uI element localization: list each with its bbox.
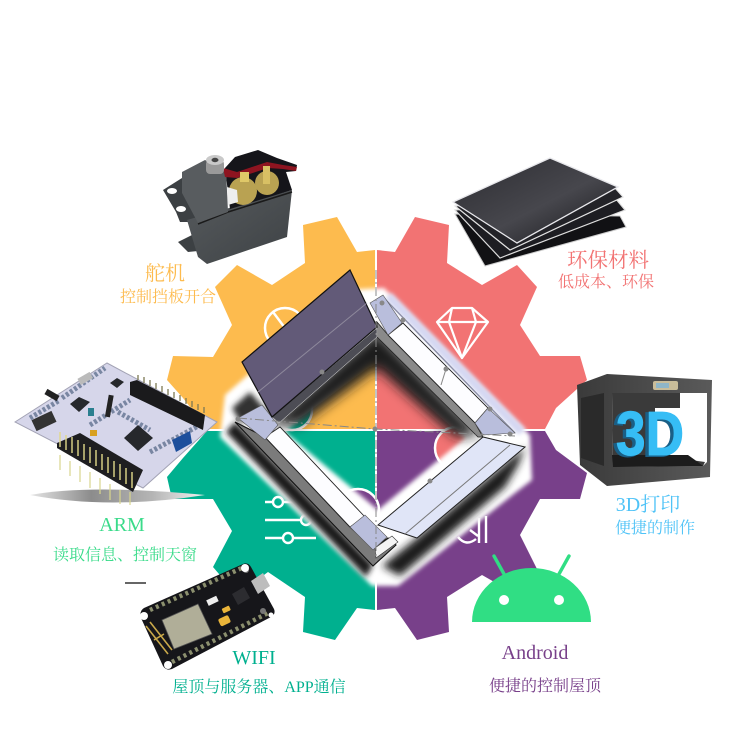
USB port [251, 573, 270, 594]
ST logo [172, 431, 192, 452]
upper right pins [138, 375, 204, 413]
servo body seam [198, 192, 292, 224]
printer interior [612, 393, 705, 467]
label: servo [120, 262, 216, 306]
label: 3D printing [615, 493, 695, 537]
PCB [15, 363, 217, 488]
3D text logo: 3D [616, 400, 684, 469]
plate 3 [455, 198, 625, 258]
central frame: soft halo and shadow [220, 288, 532, 586]
pin rows [150, 567, 268, 662]
label: eco materials: 环保材料 [567, 249, 649, 272]
plate 2 [455, 188, 623, 250]
label: ARM: ARM [99, 514, 145, 536]
gear quadrant: green [167, 431, 375, 640]
panel fold line [258, 303, 367, 392]
label: eco materials: 低成本、环保 [558, 273, 654, 291]
label: servo: 舵机 [145, 262, 185, 285]
servo white gear [227, 187, 238, 205]
white chip and buttons [206, 567, 266, 614]
label: eco materials [558, 249, 654, 291]
small jumpers and parts [31, 372, 114, 436]
label: servo: 控制挡板开合 [120, 288, 216, 306]
icon: circle on purple [435, 427, 477, 469]
printer shell [577, 374, 712, 486]
bottom corner white piece [375, 536, 398, 558]
servo motor image [163, 150, 297, 264]
servo lower body [187, 190, 292, 264]
light solar panel [378, 437, 525, 538]
android eyes [499, 595, 564, 605]
board shadow [30, 490, 205, 502]
circuit traces and silk [30, 368, 200, 452]
icon: diamond on coral [437, 308, 488, 358]
servo mounting ears [163, 178, 200, 252]
main chip [232, 587, 250, 605]
label: ARM: 读取信息、控制天窗 [53, 546, 197, 564]
WiFi NodeMCU board image [140, 563, 275, 670]
icon: circle on yellow lower [272, 390, 312, 430]
servo head [182, 160, 228, 223]
lower left gold pins [60, 432, 132, 488]
antenna [146, 622, 172, 654]
label: ARM [53, 514, 197, 564]
ARM development board image [15, 363, 217, 505]
gear quadrant: coral [377, 217, 587, 429]
upper right header [130, 380, 205, 430]
servo red strip [223, 162, 297, 178]
frame corners [238, 295, 515, 550]
gear quadrant: yellow [167, 217, 375, 429]
icon: Android robot [472, 556, 591, 622]
printer opening [612, 393, 707, 467]
ear holes [167, 188, 186, 212]
bar seam [441, 369, 446, 385]
servo shaft [206, 155, 224, 174]
capacitors [218, 605, 231, 627]
label: 3D printing: 便捷的制作 [615, 518, 695, 537]
top right bar outer edge [383, 297, 515, 433]
joints [236, 300, 512, 484]
label: WIFI: WIFI [232, 647, 276, 669]
icon: sliders on green [265, 497, 316, 543]
lower left bar outer strip [235, 422, 396, 566]
pins below board [60, 455, 130, 505]
mounting holes [140, 564, 274, 669]
light panel fold line [405, 445, 510, 534]
android head [472, 568, 591, 622]
android antennas [494, 556, 569, 574]
acrylic plates image [453, 158, 626, 266]
lower left header [57, 433, 143, 492]
3D text logo: 3D [613, 401, 681, 470]
dark solar panel [242, 270, 377, 417]
gear quadrant: purple [377, 431, 587, 640]
frame bars: white panels [265, 323, 488, 527]
servo gears [229, 166, 279, 205]
label: 3D printing: 3D打印 [616, 493, 680, 516]
label: Android: 便捷的控制屋顶 [489, 676, 602, 695]
plate 4 [455, 214, 626, 266]
icon: compass wheel on yellow [265, 308, 305, 348]
plate 1 top [453, 158, 618, 243]
label: Android [489, 642, 602, 695]
short dash [125, 582, 146, 584]
build plate [612, 455, 703, 467]
label: Android: Android [502, 642, 568, 664]
MCU chips [70, 378, 153, 451]
ESP shield [162, 604, 212, 649]
servo cavity and top block [225, 150, 297, 209]
label: WIFI: 屋顶与服务器、APP通信 [172, 678, 346, 696]
top right bar inner strip [377, 322, 483, 437]
central frame: roof model [235, 270, 525, 566]
icon: tool on purple [458, 516, 486, 543]
wifi PCB [140, 563, 275, 670]
3D printer image [577, 374, 712, 486]
panel hinge strip [272, 328, 377, 423]
label: WIFI [172, 647, 346, 696]
printer left chamber [581, 393, 604, 466]
axis lines [238, 270, 515, 562]
icon: circle on green [337, 489, 379, 531]
control screen [653, 381, 678, 390]
